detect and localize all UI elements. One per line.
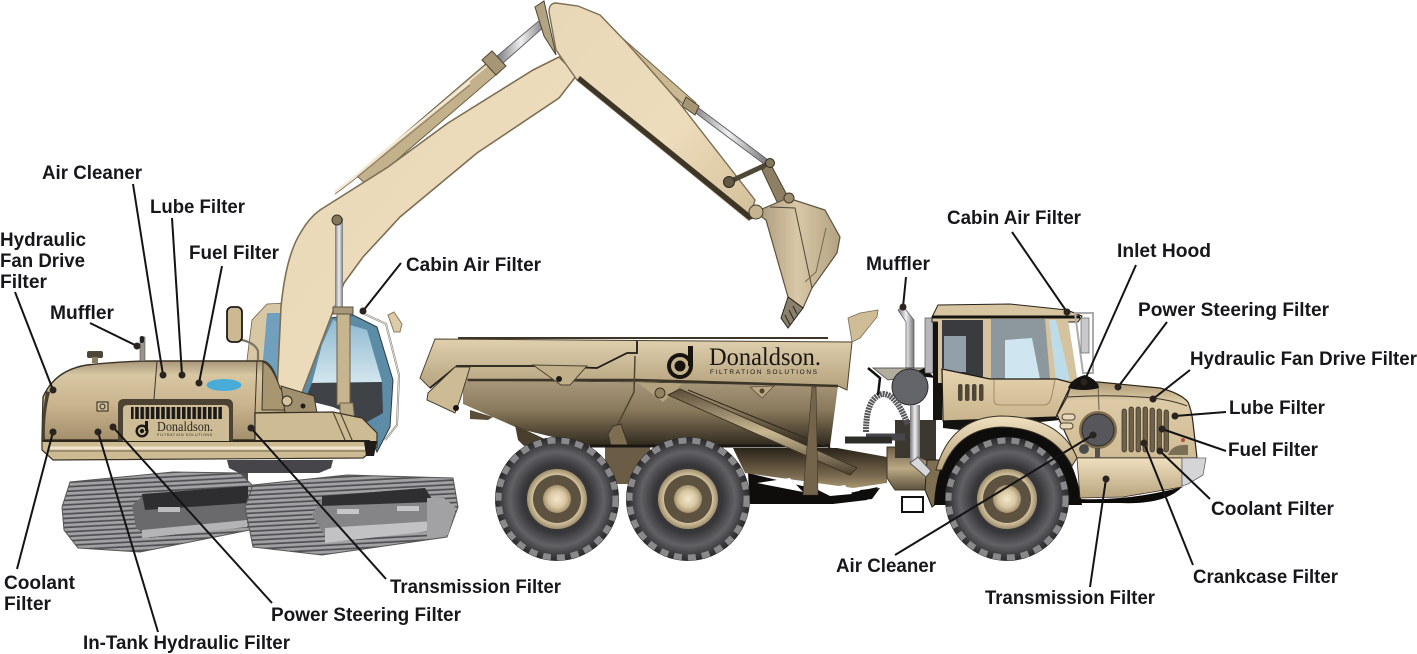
dump truck logo: Donaldson. — [709, 344, 821, 371]
fuel cap — [87, 351, 103, 363]
exhaust stack and intake — [845, 306, 935, 477]
label: cabin air filter — [360, 255, 542, 314]
label: truck hydraulic fan drive filter — [1150, 349, 1417, 402]
label: inlet hood — [1080, 241, 1211, 386]
label: hydraulic fan drive filter: Fan Drive — [0, 251, 85, 272]
label: truck muffler — [866, 254, 931, 310]
label: in-tank hydraulic filter — [83, 428, 291, 654]
callouts: excavator — [0, 163, 562, 654]
front wheel and fender — [902, 416, 1206, 561]
label: truck lube filter — [1172, 398, 1326, 420]
label: truck coolant filter: Coolant Filter — [1211, 499, 1335, 520]
label: fuel filter — [189, 243, 280, 386]
label: coolant filter — [4, 428, 76, 615]
label: truck transmission filter — [985, 476, 1156, 609]
rear wheel 1 — [495, 437, 619, 561]
vent slats — [131, 407, 222, 419]
label: air cleaner — [42, 163, 166, 378]
upper housing — [42, 361, 317, 440]
truck cab — [925, 304, 1093, 430]
excavator logo — [136, 420, 213, 438]
label: hydraulic fan drive filter: Filter — [0, 272, 48, 293]
blue oval — [206, 379, 242, 391]
label: truck transmission filter: Transmission Filter — [985, 588, 1156, 609]
label: truck hydraulic fan drive filter: Hydraulic Fan Drive Filter — [1190, 349, 1417, 370]
vertical boom cylinder — [332, 215, 356, 433]
round air cleaner cover — [1079, 411, 1117, 458]
engine door panel — [118, 399, 233, 441]
excavator tracks — [62, 472, 458, 555]
label: truck air cleaner — [836, 432, 1096, 577]
lower deck — [42, 412, 377, 460]
stick — [535, 1, 755, 220]
excavator logo: FILTRATION SOLUTIONS — [157, 433, 213, 437]
boom cylinder — [335, 20, 546, 194]
label: in-tank hydraulic filter: In-Tank Hydraulic Filter — [83, 633, 291, 654]
rear wheel 2 — [626, 437, 750, 561]
operator cab — [247, 303, 402, 452]
label: air cleaner: Air Cleaner — [42, 163, 143, 184]
slew ring — [227, 460, 333, 473]
label: crankcase filter: Crankcase Filter — [1193, 567, 1339, 588]
rear black frame — [748, 473, 878, 504]
label: truck muffler: Muffler — [866, 254, 931, 275]
label: muffler: Muffler — [50, 303, 115, 324]
label: truck cabin air filter: Cabin Air Filter — [947, 208, 1082, 229]
label: muffler — [50, 303, 140, 350]
mirror — [227, 307, 258, 360]
label: truck coolant filter — [1156, 448, 1335, 520]
label: coolant filter: Coolant — [4, 573, 76, 594]
label: hydraulic fan drive filter — [0, 230, 86, 394]
headlamp cluster — [1168, 445, 1188, 455]
bucket — [749, 193, 840, 328]
label: hydraulic fan drive filter: Hydraulic — [0, 230, 86, 251]
stick cylinder — [612, 36, 768, 164]
truck hood — [1057, 375, 1197, 458]
bucket linkage — [724, 158, 788, 204]
label: transmission filter: Transmission Filter — [390, 577, 562, 598]
callouts: dump truck — [836, 208, 1417, 609]
label: inlet hood: Inlet Hood — [1117, 241, 1211, 262]
dump truck logo — [667, 344, 821, 379]
label: truck cabin air filter — [947, 208, 1082, 316]
label: truck power steering filter: Power Steering Filter — [1138, 300, 1330, 321]
excavator — [42, 1, 840, 555]
label: fuel filter: Fuel Filter — [189, 243, 280, 264]
label: transmission filter — [248, 424, 562, 598]
boom — [276, 57, 577, 412]
label: power steering filter: Power Steering Filter — [271, 605, 462, 626]
chassis — [590, 420, 941, 507]
label: lube filter — [150, 197, 246, 378]
label: coolant filter: Filter — [4, 594, 52, 615]
label: truck fuel filter — [1158, 426, 1319, 461]
label: truck fuel filter: Fuel Filter — [1228, 440, 1319, 461]
dump bin body — [420, 310, 878, 460]
inspection plate — [97, 402, 108, 411]
dump truck logo: FILTRATION SOLUTIONS — [710, 369, 818, 376]
dump truck — [420, 304, 1206, 561]
label: lube filter: Lube Filter — [150, 197, 246, 218]
excavator logo: Donaldson. — [157, 420, 213, 435]
exhaust muffler — [140, 336, 145, 361]
label: truck lube filter: Lube Filter — [1229, 398, 1326, 419]
hood grille — [1122, 407, 1168, 452]
label: crankcase filter — [1140, 440, 1339, 588]
label: truck power steering filter — [1114, 300, 1330, 390]
inlet hood cap — [1068, 375, 1099, 390]
hoist cylinder — [655, 387, 857, 495]
label: truck air cleaner: Air Cleaner — [836, 556, 937, 577]
label: cabin air filter: Cabin Air Filter — [406, 255, 542, 276]
label: power steering filter — [110, 424, 462, 626]
